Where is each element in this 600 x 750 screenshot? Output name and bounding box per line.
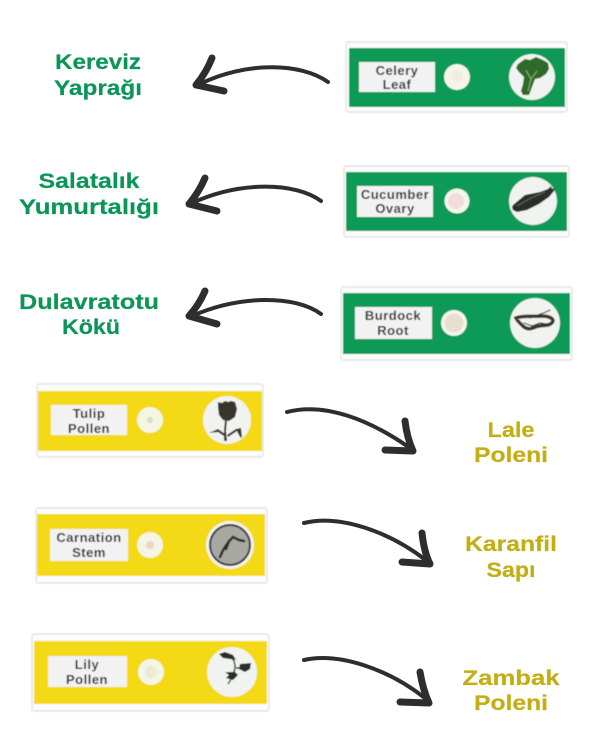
icon: carnation stem (210, 525, 250, 565)
heading: Zambak Poleni (462, 667, 560, 715)
arrow: celery to heading (196, 58, 328, 91)
slide: Burdock Root (341, 287, 572, 360)
heading: Dulavratotu Kökü (19, 291, 159, 339)
heading: Dulavratotu Kökü: Dulavratotu (19, 291, 159, 314)
slide: Celery Leaf: Leaf (383, 77, 412, 92)
heading: Lale Poleni: Lale (488, 419, 534, 442)
heading: Salatalık Yumurtalığı: Yumurtalığı (19, 196, 159, 219)
slide: Lily Pollen (32, 634, 269, 711)
heading: Lale Poleni (474, 419, 548, 467)
heading: Karanfil Sapı (465, 533, 557, 582)
slide: Burdock Root: Root (377, 323, 409, 338)
heading: Kereviz Yaprağı: Kereviz (55, 51, 141, 74)
icon: tulip (209, 401, 242, 441)
slide: Tulip Pollen: Tulip (73, 406, 105, 421)
slide: Carnation Stem: Stem (72, 545, 106, 560)
slide: Celery Leaf: Celery (376, 63, 419, 78)
slide: Burdock Root: Burdock (365, 308, 421, 323)
arrow: cucumber to heading (189, 178, 321, 211)
icon: cucumbers (512, 186, 555, 212)
heading: Karanfil Sapı: Sapı (486, 559, 536, 582)
icon: lily (219, 652, 251, 684)
slide: Carnation Stem: Carnation (56, 530, 122, 545)
slide: Cucumber Ovary: Ovary (375, 201, 415, 216)
icon: burdock root (516, 310, 553, 329)
slide: Cucumber Ovary: Cucumber (361, 187, 429, 202)
slide: Carnation Stem (36, 508, 267, 583)
heading: Karanfil Sapı: Karanfil (465, 533, 557, 556)
heading: Kereviz Yaprağı (54, 51, 142, 100)
heading: Zambak Poleni: Poleni (474, 692, 548, 715)
slide: Lily Pollen: Pollen (66, 672, 108, 687)
arrow: lily to heading (304, 658, 429, 703)
arrow: tulip to heading (287, 409, 413, 451)
icon: celery leaf (516, 57, 549, 95)
heading: Kereviz Yaprağı: Yaprağı (54, 77, 142, 100)
slide: Celery Leaf (346, 42, 567, 112)
heading: Salatalık Yumurtalığı (19, 170, 159, 219)
slide: Lily Pollen: Lily (75, 657, 99, 672)
slide: Tulip Pollen (37, 384, 263, 457)
slide: Cucumber Ovary (344, 166, 569, 237)
heading: Salatalık Yumurtalığı: Salatalık (38, 170, 140, 193)
arrow: burdock to heading (189, 291, 321, 324)
heading: Dulavratotu Kökü: Kökü (62, 316, 120, 339)
arrow: carnation to heading (304, 521, 430, 564)
slide: Tulip Pollen: Pollen (68, 421, 110, 436)
heading: Zambak Poleni: Zambak (462, 667, 560, 690)
heading: Lale Poleni: Poleni (474, 444, 548, 467)
